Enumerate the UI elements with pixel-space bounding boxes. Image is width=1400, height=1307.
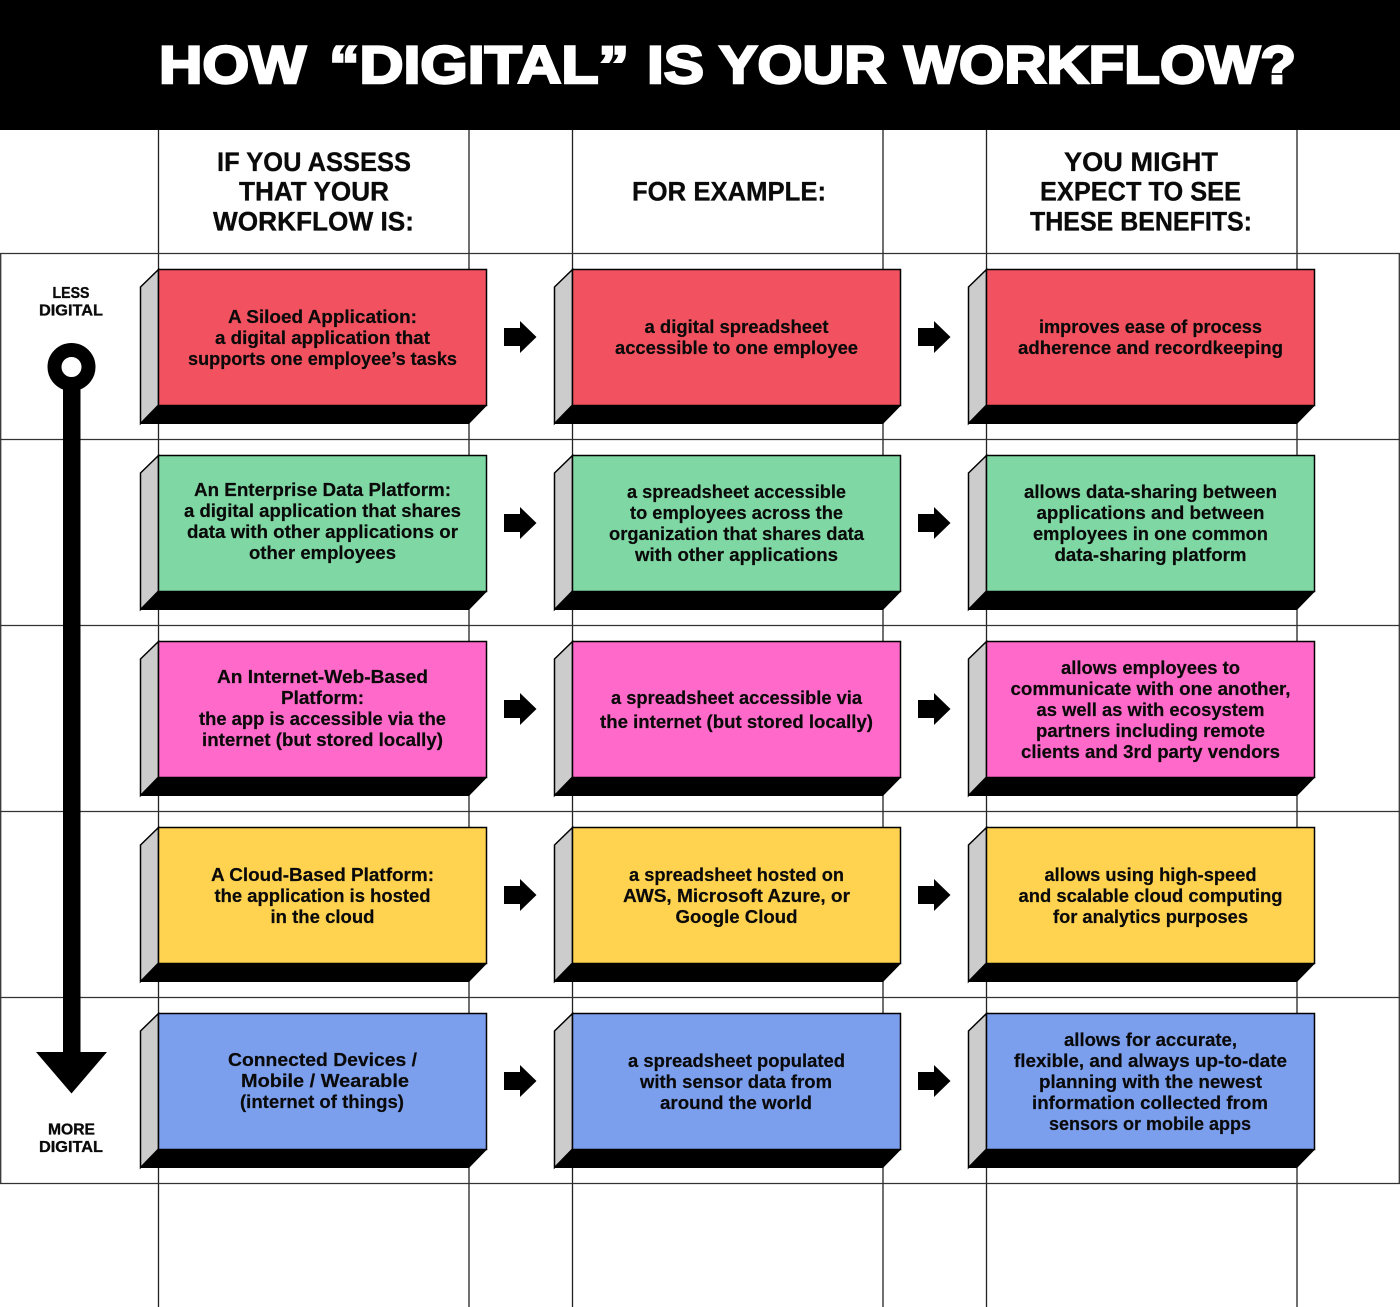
box: employee communication: as well as with ecosystem (1036, 699, 1264, 720)
arrow (504, 1065, 536, 1097)
row 4: cloud-based platform (140, 828, 1316, 982)
box: employee communication (968, 642, 1316, 796)
box: internet-web-based platform: internet (but stored locally) (202, 729, 443, 750)
box: sensor spreadsheet: with sensor data from (639, 1071, 832, 1092)
box: data sharing: employees in one common (1033, 523, 1268, 544)
arrow (918, 507, 950, 539)
title banner: HOW (159, 36, 306, 95)
column heading: benefits: THESE BENEFITS: (1030, 206, 1252, 236)
box: digital spreadsheet: accessible to one employee (615, 337, 858, 358)
box: cloud-based platform: the application is hosted (214, 885, 430, 906)
box: internet-web-based platform: An Internet-Web-Based (217, 666, 428, 687)
box: cloud computing: for analytics purposes (1053, 906, 1248, 927)
box: sensor spreadsheet: a spreadsheet populated (628, 1050, 845, 1071)
box: up-to-date planning: flexible, and always up-to-date (1014, 1050, 1287, 1071)
box: connected devices: Connected Devices / (228, 1049, 417, 1070)
row 1: siloed application (140, 270, 1316, 424)
box: enterprise data platform: An Enterprise Data Platform: (194, 479, 451, 500)
box: connected devices: Mobile / Wearable (241, 1070, 409, 1091)
title banner: IS (647, 36, 704, 95)
box: cloud-based platform (140, 828, 488, 982)
box: employee communication: communicate with one another, (1010, 678, 1290, 699)
box: up-to-date planning: sensors or mobile apps (1049, 1113, 1251, 1134)
box: up-to-date planning: planning with the newest (1039, 1071, 1262, 1092)
row 2: enterprise data platform (140, 456, 1316, 610)
column heading: benefits: EXPECT TO SEE (1040, 176, 1241, 206)
column heading: if you assess: IF YOU ASSESS (217, 147, 411, 177)
box: hosted spreadsheet: Google Cloud (676, 906, 798, 927)
box: up-to-date planning: information collected from (1032, 1092, 1268, 1113)
box: shared spreadsheet: with other applications (634, 544, 838, 565)
box: cloud-based platform: in the cloud (270, 906, 374, 927)
label: more digital (39, 1122, 103, 1156)
arrow (504, 321, 536, 353)
box: sensor spreadsheet: around the world (660, 1092, 812, 1113)
box: internet-web-based platform: Platform: (281, 687, 364, 708)
box: up-to-date planning: allows for accurate, (1064, 1029, 1237, 1050)
box: enterprise data platform (140, 456, 488, 610)
box: siloed application (140, 270, 488, 424)
box: siloed application: A Siloed Application: (228, 306, 417, 327)
box: data sharing: applications and between (1036, 502, 1264, 523)
box: process adherence (968, 270, 1316, 424)
column heading: if you assess: THAT YOUR (239, 176, 389, 206)
label: less digital (39, 285, 103, 320)
box: shared spreadsheet: a spreadsheet accessible (627, 481, 846, 502)
label: more digital: DIGITAL (39, 1139, 103, 1156)
box: sensor spreadsheet (554, 1014, 902, 1168)
row 5: connected devices (140, 1014, 1316, 1168)
arrow (504, 879, 536, 911)
box: spreadsheet via internet: the internet (but stored locally) (600, 711, 873, 732)
box: process adherence: adherence and recordkeeping (1018, 337, 1283, 358)
label: more digital: MORE (48, 1122, 95, 1138)
box: enterprise data platform: other employees (249, 542, 396, 563)
arrow (504, 693, 536, 725)
box: employee communication: allows employees to (1061, 657, 1240, 678)
box: data sharing: allows data-sharing between (1024, 481, 1277, 502)
box: hosted spreadsheet: a spreadsheet hosted on (629, 864, 844, 885)
arrow (918, 1065, 950, 1097)
box: shared spreadsheet (554, 456, 902, 610)
title banner: WORKFLOW? (904, 36, 1296, 95)
box: cloud computing: allows using high-speed (1044, 864, 1256, 885)
box: spreadsheet via internet: a spreadsheet accessible via (611, 687, 863, 708)
box: hosted spreadsheet: AWS, Microsoft Azure, or (623, 885, 850, 906)
box: data sharing: data-sharing platform (1054, 544, 1246, 565)
box: cloud computing (968, 828, 1316, 982)
box: process adherence: improves ease of process (1039, 316, 1262, 337)
box: spreadsheet via internet (554, 642, 902, 796)
box: internet-web-based platform (140, 642, 488, 796)
column heading: benefits (1030, 147, 1252, 236)
box: enterprise data platform: data with other applications or (187, 521, 458, 542)
arrow (504, 507, 536, 539)
box: connected devices: (internet of things) (240, 1091, 404, 1112)
box: employee communication: partners including remote (1036, 720, 1265, 741)
scale arrow: less to more digital (36, 350, 107, 1094)
title banner (0, 0, 1400, 130)
box: cloud-based platform: A Cloud-Based Platform: (211, 864, 434, 885)
arrow (918, 321, 950, 353)
label: less digital: LESS (52, 285, 90, 302)
label: less digital: DIGITAL (39, 302, 103, 320)
column heading: benefits: YOU MIGHT (1064, 147, 1218, 177)
column heading: if you assess (213, 147, 414, 236)
box: shared spreadsheet: organization that shares data (609, 523, 865, 544)
box: employee communication: clients and 3rd party vendors (1021, 741, 1280, 762)
box: digital spreadsheet (554, 270, 902, 424)
arrow (918, 879, 950, 911)
box: connected devices (140, 1014, 488, 1168)
box: internet-web-based platform: the app is accessible via the (199, 708, 446, 729)
box: data sharing (968, 456, 1316, 610)
box: siloed application: supports one employee’s tasks (188, 348, 457, 369)
title banner: YOUR (719, 36, 886, 95)
box: siloed application: a digital application that (215, 327, 430, 348)
box: up-to-date planning (968, 1014, 1316, 1168)
box: shared spreadsheet: to employees across the (630, 502, 843, 523)
title banner: “DIGITAL” (329, 36, 629, 95)
arrow (918, 693, 950, 725)
box: hosted spreadsheet (554, 828, 902, 982)
column heading: for example: FOR EXAMPLE: (632, 176, 826, 206)
box: digital spreadsheet: a digital spreadsheet (644, 316, 828, 337)
box: enterprise data platform: a digital application that shares (184, 500, 461, 521)
row 3: internet-web-based platform (140, 642, 1316, 796)
box: cloud computing: and scalable cloud computing (1018, 885, 1282, 906)
column heading: if you assess: WORKFLOW IS: (213, 206, 414, 236)
